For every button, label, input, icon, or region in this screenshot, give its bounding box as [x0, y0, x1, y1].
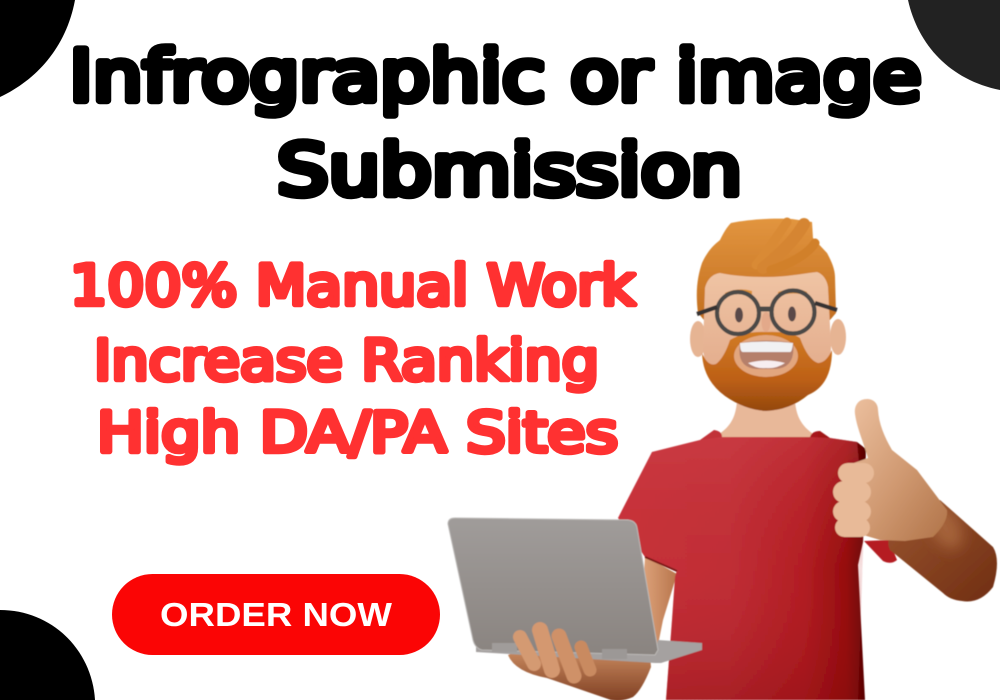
mouth	[734, 335, 798, 377]
title: Infrographic or image	[70, 36, 922, 118]
left forearm	[640, 556, 677, 650]
nose	[762, 312, 770, 332]
hair back	[697, 219, 836, 320]
title: Submission	[277, 130, 742, 212]
red benefit list: High DA/PA Sites	[97, 400, 618, 464]
glasses	[697, 290, 837, 334]
fingers	[833, 463, 874, 537]
eyes	[735, 306, 796, 322]
title	[70, 36, 922, 212]
red benefit list: 100% Manual Work	[70, 254, 635, 318]
order now button: ORDER NOW	[160, 596, 393, 633]
beard	[702, 332, 832, 411]
right forearm	[888, 500, 997, 601]
corner circle: bottom left	[0, 610, 95, 700]
wrist shading	[932, 506, 967, 552]
thumbs-up hand	[833, 399, 969, 555]
eyebrows	[725, 289, 807, 296]
fingers holding laptop	[520, 630, 590, 676]
corner circle: top left	[0, 0, 75, 97]
shirt	[618, 430, 897, 700]
hair quiff	[756, 222, 815, 270]
red benefit list: Increase Ranking	[94, 328, 599, 392]
person illustration	[448, 219, 997, 700]
face	[703, 272, 831, 405]
red benefit list	[70, 254, 635, 464]
corner circle: top right	[908, 0, 1000, 90]
right sleeve cuff	[864, 540, 897, 563]
ears	[690, 319, 846, 357]
hand palm under laptop	[508, 650, 651, 700]
order now button	[112, 574, 440, 655]
laptop	[448, 518, 702, 663]
neck	[712, 400, 820, 438]
